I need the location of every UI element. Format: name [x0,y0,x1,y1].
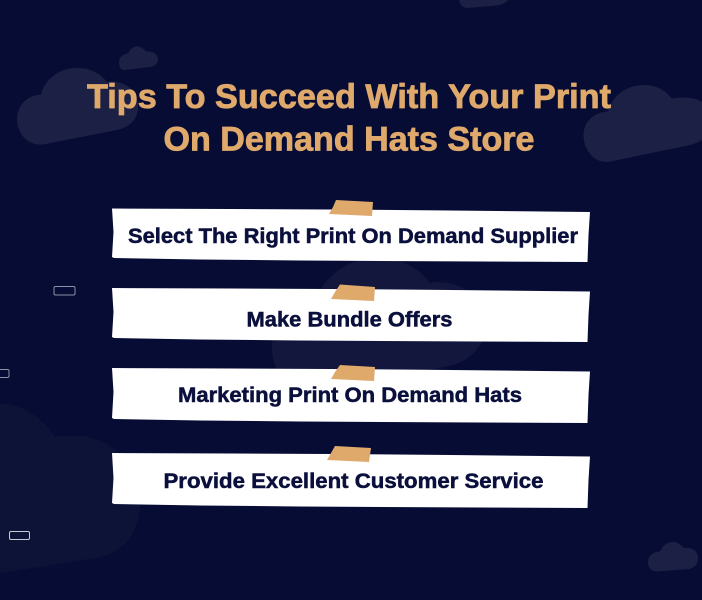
card text: Make Bundle Offers [246,309,452,332]
tape [329,200,373,216]
tape [327,446,371,462]
outlined rectangle left edge [0,370,9,378]
title line 1: Tips To Succeed With Your Print [87,78,611,116]
card text: Select The Right Print On Demand Supplier [128,225,578,248]
card: select supplier [112,200,590,262]
card text: Marketing Print On Demand Hats [178,384,522,407]
card background [112,453,590,508]
cloud: upper right large [584,85,702,162]
card: marketing [112,365,590,423]
outlined rectangle upper [54,286,75,295]
cloud: upper left small [119,46,158,70]
tape [331,365,375,381]
outlined rectangle lower [10,532,30,540]
tape [331,284,375,301]
card: customer service [112,446,590,508]
title line 2: On Demand Hats Store [164,121,534,159]
card: bundle offers [112,284,590,342]
cloud: lower left large [0,403,140,583]
cloud: bottom right small [648,542,698,572]
cloud: centre [272,258,485,392]
card text: Provide Excellent Customer Service [164,470,544,493]
cloud: upper left large [17,68,138,145]
card background [112,368,590,423]
card background [112,288,590,342]
card background [112,208,590,262]
small outlined rectangles [0,286,75,540]
title [87,78,611,159]
cloud: top edge [459,0,508,8]
